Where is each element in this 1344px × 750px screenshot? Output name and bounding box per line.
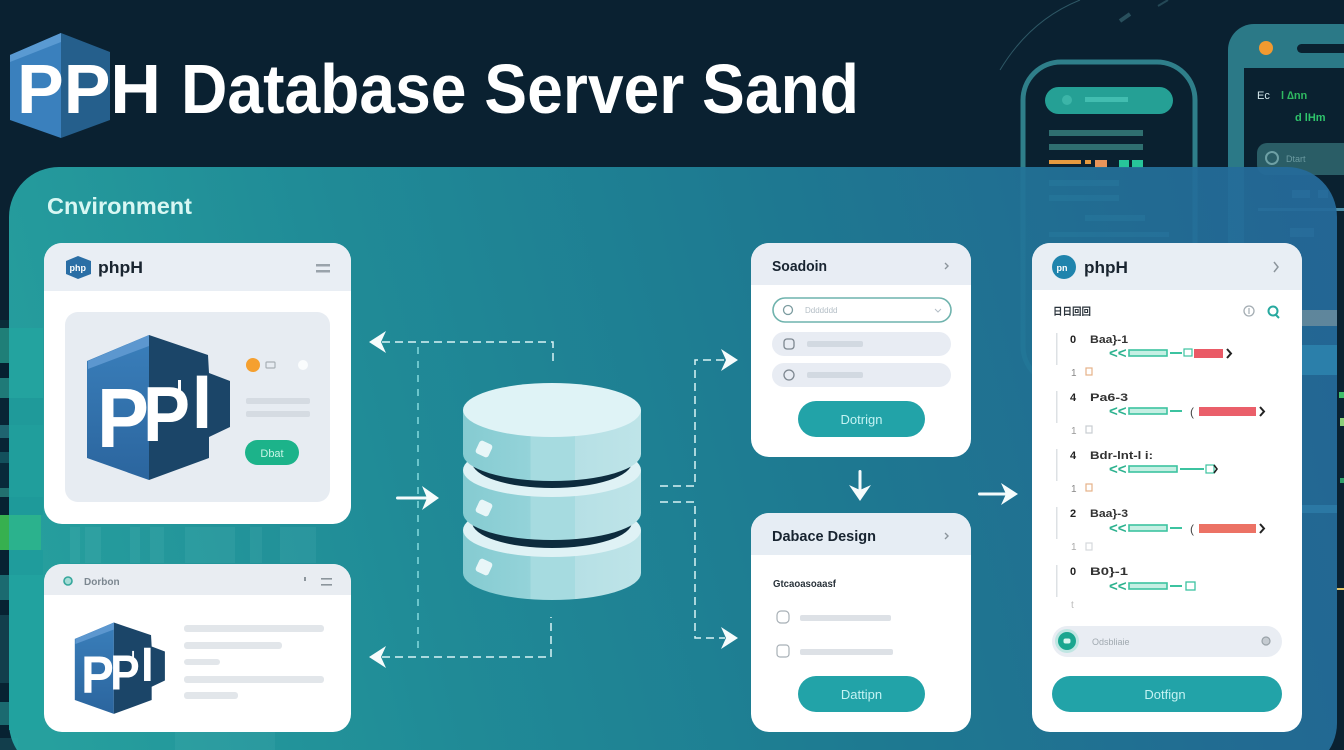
icon: large PHP logo: P	[97, 371, 149, 465]
icon: chevron	[945, 533, 948, 539]
panel: PHP main card	[44, 243, 351, 524]
phone mockup right background	[1228, 24, 1344, 384]
arrow: into database	[396, 486, 439, 510]
button: Dotfign	[1144, 687, 1186, 702]
code row 5: B0}-1	[1090, 566, 1128, 578]
icon: database stack	[463, 383, 641, 600]
code row 2: 1	[1071, 426, 1077, 437]
code row 4	[1056, 507, 1264, 553]
list row 1	[777, 611, 891, 623]
icon: info	[1244, 306, 1254, 316]
phone mockup right background: d lHm	[1295, 112, 1326, 124]
code row 4: 1	[1071, 542, 1077, 553]
icon: chevron	[945, 263, 948, 269]
field 2	[772, 332, 951, 356]
code row 2: <<	[1109, 403, 1127, 420]
icon: chevron	[1274, 262, 1278, 272]
icon: search	[1268, 306, 1279, 318]
code row 3: <<	[1109, 461, 1127, 478]
card title: phpH	[98, 258, 143, 277]
icon: small php badge	[66, 256, 91, 279]
code row 1: <<	[1109, 345, 1127, 362]
card title: phpH	[1084, 258, 1128, 277]
panel: session card	[751, 243, 971, 457]
button: Dattipn	[841, 687, 882, 702]
panel: secondary PHP card	[44, 564, 351, 732]
layer 2	[463, 470, 641, 540]
button	[798, 401, 925, 437]
decorative arc top right	[1000, 0, 1168, 70]
panel heading: Cnvironment	[47, 193, 192, 219]
code row 3: 1	[1071, 484, 1077, 495]
left edge code strip	[0, 320, 18, 750]
arrow: to code card	[978, 483, 1018, 505]
title	[10, 33, 859, 138]
icon: menu	[304, 577, 332, 586]
search field	[773, 298, 951, 322]
arrow: bottom dashed connector	[369, 617, 551, 668]
icon: large PHP logo: P	[143, 370, 190, 458]
subheading: Gtcaoasoaasf	[773, 579, 837, 590]
phone mockup right background: l ∆nn	[1281, 90, 1308, 102]
code row 2: (	[1190, 405, 1194, 419]
icon: large PHP logo	[87, 335, 230, 480]
code row 5: <<	[1109, 578, 1127, 595]
icon: large PHP logo: I	[192, 360, 212, 445]
arrow: database to session card	[660, 349, 738, 486]
icon: status dot	[64, 577, 72, 585]
code row 4: (	[1190, 522, 1194, 536]
inner logo panel	[65, 312, 330, 502]
panel: database design card	[751, 513, 971, 732]
code row 2: 4	[1070, 392, 1077, 404]
code row 1: 1	[1071, 368, 1077, 379]
list header: 日日回回	[1053, 306, 1091, 318]
title text: PPH	[17, 50, 161, 128]
arrow: session to design	[849, 470, 871, 501]
list row 2	[777, 645, 893, 657]
phone mockup right background: Dtart	[1286, 154, 1306, 164]
code row 4: <<	[1109, 520, 1127, 537]
phone mockup right background: Ec	[1257, 90, 1270, 102]
button: Dotrign	[841, 412, 882, 427]
button	[245, 440, 299, 465]
card title: Dabace Design	[772, 528, 876, 545]
arrow: vertical dashed link	[417, 347, 419, 655]
code row 2	[1056, 391, 1264, 437]
field 3	[772, 363, 951, 387]
code row 1: 0	[1070, 334, 1076, 346]
button: Dbat	[260, 448, 284, 460]
code row 3	[1056, 449, 1217, 495]
right edge code strip	[1336, 236, 1344, 590]
search field: Ddddddd	[805, 306, 837, 315]
phone mockup left background	[1023, 62, 1195, 384]
code row 5	[1056, 565, 1195, 611]
button	[798, 676, 925, 712]
code row 4: 2	[1070, 508, 1076, 520]
code row 2: Pa6-3	[1090, 392, 1128, 404]
input bar: Odsbliaie	[1092, 637, 1130, 647]
text placeholder lines	[184, 625, 324, 699]
icon: small php badge: php	[70, 263, 86, 273]
icon: PHP logo	[75, 623, 165, 714]
icon: php badge: pn	[1056, 263, 1068, 273]
card title: Soadoin	[772, 258, 827, 275]
code row 1: Baa}-1	[1090, 334, 1128, 346]
layer 3	[463, 530, 641, 600]
icon: php badge	[1052, 255, 1076, 279]
status lights	[475, 440, 493, 576]
main environment panel	[9, 167, 1337, 750]
layer 1	[463, 410, 641, 481]
code row 1	[1056, 333, 1231, 379]
status row	[246, 358, 310, 417]
icon: title hexagon logo	[10, 33, 110, 138]
code row 3: Bdr-lnt-l i:	[1090, 450, 1153, 462]
faint background screens	[9, 310, 1337, 750]
title text: Database Server Sand	[181, 50, 859, 128]
arrow: top dashed connector to PHP card	[369, 331, 553, 366]
panel: code listing card	[1032, 243, 1302, 732]
card title: Dorbon	[84, 577, 120, 588]
code row 4: Baa}-3	[1090, 508, 1128, 520]
code row 5: 0	[1070, 566, 1076, 578]
icon: menu	[316, 264, 330, 272]
icon: PHP logo: P	[110, 646, 140, 700]
icon: PHP logo: I	[141, 639, 154, 692]
code row 5: t	[1071, 600, 1074, 611]
button	[1052, 676, 1282, 712]
input bar	[1052, 626, 1282, 657]
arrow: database to design card	[660, 502, 738, 649]
icon: PHP logo: P	[81, 646, 114, 705]
code row 3: 4	[1070, 450, 1077, 462]
